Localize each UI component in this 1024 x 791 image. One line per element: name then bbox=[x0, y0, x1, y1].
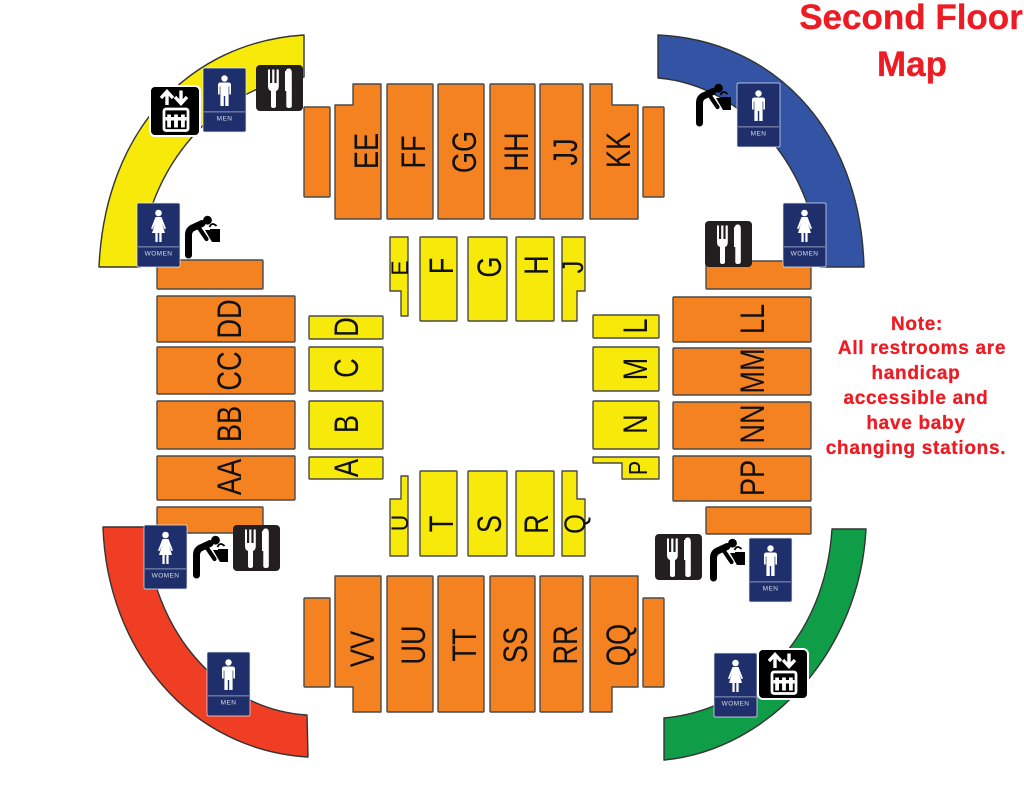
section DD bbox=[157, 296, 295, 342]
section T: T bbox=[422, 516, 461, 532]
section F bbox=[420, 237, 461, 321]
section J bbox=[556, 237, 589, 321]
section CC bbox=[157, 347, 295, 394]
section BB: BB bbox=[210, 406, 249, 442]
section N: N bbox=[616, 414, 655, 434]
section DD: DD bbox=[210, 299, 249, 339]
section S bbox=[468, 471, 509, 556]
icon: women's restroom green quadrant: WOMEN bbox=[722, 700, 749, 708]
section EE: EE bbox=[347, 133, 386, 169]
section EE bbox=[335, 84, 386, 219]
section GG bbox=[438, 84, 484, 219]
section C: C bbox=[327, 358, 366, 378]
section PP bbox=[673, 456, 811, 501]
section SS bbox=[490, 576, 535, 712]
icon: men's restroom blue quadrant: MEN bbox=[751, 130, 766, 138]
section CC: CC bbox=[210, 351, 249, 391]
section P bbox=[593, 457, 659, 479]
icon: food red quadrant bbox=[233, 525, 280, 571]
section LL bbox=[673, 297, 811, 342]
section U bbox=[386, 476, 413, 556]
icon: fountain red quadrant bbox=[196, 536, 228, 575]
section QQ bbox=[590, 576, 638, 712]
section TT bbox=[438, 576, 484, 712]
section GG: GG bbox=[445, 131, 484, 173]
section S: S bbox=[470, 515, 509, 533]
section KK: KK bbox=[599, 131, 638, 168]
section E bbox=[386, 237, 413, 316]
section L bbox=[593, 315, 659, 338]
section D: D bbox=[327, 317, 366, 337]
icon: men's restroom blue quadrant bbox=[737, 83, 780, 147]
icon: elevator yellow quadrant bbox=[150, 86, 200, 136]
panel: green concourse quadrant bbox=[664, 529, 866, 760]
section N bbox=[593, 401, 659, 449]
panel: yellow concourse quadrant bbox=[99, 35, 304, 267]
section B bbox=[309, 401, 383, 449]
section HH bbox=[490, 84, 536, 219]
section F: F bbox=[422, 258, 461, 274]
section BB bbox=[157, 401, 295, 449]
panel: left orange sections bbox=[157, 260, 295, 533]
panel: right orange sections bbox=[673, 261, 811, 534]
panel: bottom orange sections bbox=[304, 576, 664, 712]
note: All restrooms are bbox=[838, 338, 1006, 359]
section UU: UU bbox=[394, 625, 433, 665]
section J: J bbox=[556, 261, 589, 273]
section U: U bbox=[386, 515, 413, 531]
section A bbox=[309, 457, 383, 479]
icon: men's restroom yellow quadrant: MEN bbox=[217, 116, 232, 122]
section G bbox=[468, 237, 509, 321]
panel: bottom yellow sections bbox=[386, 471, 591, 556]
note: changing stations. bbox=[826, 438, 1006, 459]
panel: right yellow sections bbox=[593, 315, 659, 479]
section RR: RR bbox=[546, 625, 585, 665]
panel: top yellow sections bbox=[386, 237, 589, 321]
section MM bbox=[673, 348, 811, 395]
panel: red concourse quadrant bbox=[103, 527, 308, 757]
section T bbox=[420, 471, 461, 556]
section A: A bbox=[327, 459, 366, 477]
section HH: HH bbox=[497, 132, 536, 172]
note: accessible and bbox=[844, 388, 988, 409]
icon: men's restroom red quadrant bbox=[207, 652, 250, 716]
section E: E bbox=[386, 260, 413, 276]
icon: fountain blue quadrant bbox=[700, 84, 731, 123]
section JJ bbox=[540, 84, 585, 219]
section H bbox=[516, 237, 556, 321]
icon: elevator green quadrant bbox=[758, 649, 808, 699]
section Q: Q bbox=[558, 514, 591, 534]
section VV: VV bbox=[343, 630, 382, 667]
section M bbox=[593, 347, 659, 391]
icon: women's restroom blue quadrant bbox=[783, 203, 826, 267]
icon: food blue quadrant bbox=[705, 221, 752, 267]
icon: women's restroom yellow quadrant bbox=[137, 203, 180, 267]
section MM: MM bbox=[733, 348, 772, 394]
section PP: PP bbox=[733, 460, 772, 496]
section D bbox=[309, 316, 383, 339]
section QQ: QQ bbox=[599, 624, 638, 666]
section TT: TT bbox=[445, 628, 484, 662]
section R: R bbox=[517, 514, 556, 534]
section P: P bbox=[624, 461, 654, 475]
section C bbox=[309, 347, 383, 391]
note bbox=[826, 314, 1006, 459]
icon: men's restroom green quadrant: MEN bbox=[763, 586, 778, 592]
icon: men's restroom red quadrant: MEN bbox=[221, 700, 236, 706]
section Q bbox=[558, 471, 591, 556]
icon: fountain green quadrant bbox=[714, 539, 745, 578]
panel: top orange sections bbox=[304, 84, 664, 219]
note: have baby bbox=[866, 413, 966, 434]
title bbox=[799, 0, 1023, 84]
section AA bbox=[157, 456, 295, 500]
icon: women's restroom red quadrant bbox=[144, 525, 187, 589]
section L: L bbox=[616, 318, 655, 334]
icon: men's restroom green quadrant bbox=[749, 538, 792, 602]
section FF bbox=[387, 84, 433, 219]
section AA: AA bbox=[210, 458, 249, 495]
panel: blue concourse quadrant bbox=[658, 35, 864, 267]
section NN bbox=[673, 402, 811, 449]
icon: men's restroom yellow quadrant bbox=[203, 68, 246, 132]
section M: M bbox=[616, 358, 655, 380]
section JJ: JJ bbox=[546, 138, 585, 166]
panel: left yellow sections bbox=[309, 316, 383, 479]
section H: H bbox=[517, 255, 556, 275]
icon: women's restroom green quadrant bbox=[714, 653, 757, 717]
section B: B bbox=[327, 415, 366, 433]
section VV bbox=[335, 576, 382, 712]
section FF: FF bbox=[394, 135, 433, 169]
section NN: NN bbox=[733, 404, 772, 444]
icon: women's restroom yellow quadrant: WOMEN bbox=[145, 250, 172, 258]
section R bbox=[516, 471, 556, 556]
section RR bbox=[540, 576, 585, 712]
section LL: LL bbox=[733, 304, 772, 334]
icon: women's restroom blue quadrant: WOMEN bbox=[791, 250, 818, 258]
section SS: SS bbox=[496, 627, 535, 663]
note: handicap bbox=[871, 363, 961, 384]
icon: food green quadrant bbox=[655, 534, 702, 580]
icon: food yellow quadrant bbox=[256, 65, 303, 111]
title: Map bbox=[877, 45, 947, 84]
note: Note: bbox=[891, 314, 943, 335]
icon: women's restroom red quadrant: WOMEN bbox=[152, 572, 179, 580]
section KK bbox=[590, 84, 638, 219]
section G: G bbox=[470, 256, 509, 278]
icon: fountain yellow quadrant bbox=[188, 216, 220, 255]
section UU bbox=[387, 576, 433, 712]
